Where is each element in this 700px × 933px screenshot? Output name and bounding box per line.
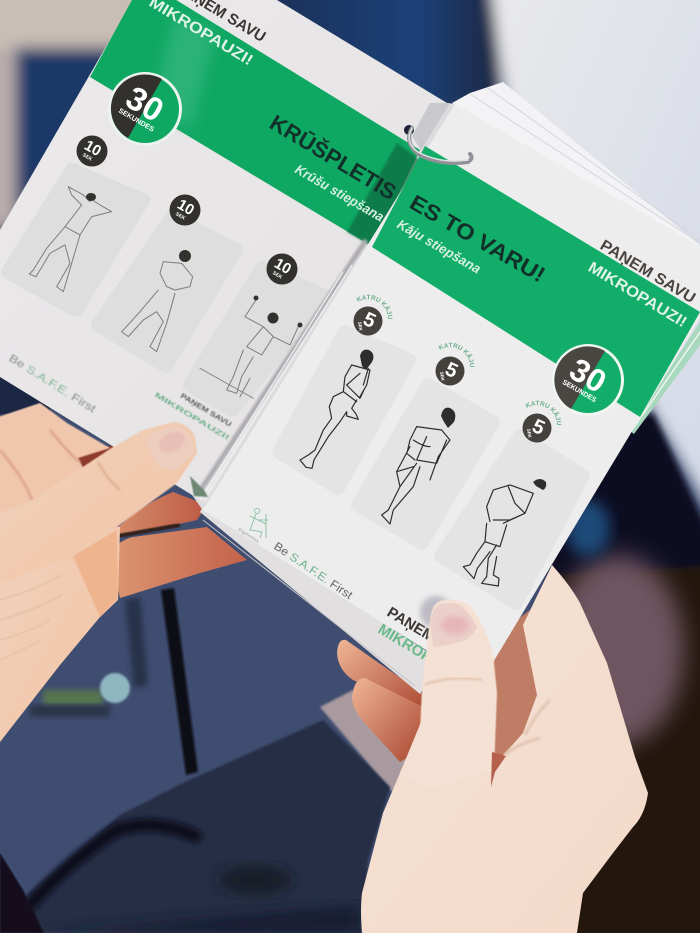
left card green band (90, 0, 420, 247)
left footer brand (153, 392, 232, 442)
figure heads (360, 350, 546, 490)
lower finger (110, 527, 247, 598)
right footer brand: MIKROPAUZI! (375, 621, 468, 686)
thumb shape (400, 600, 497, 790)
right 5 second badges: SEK (439, 371, 446, 382)
right 5 second badges: SEK (357, 321, 364, 332)
right footer brand: PAŅEM SAVU (384, 604, 477, 669)
left 30 seconds badge: SEKUNDES (117, 108, 155, 134)
right card green band (372, 146, 700, 417)
gutter pages under the left card (190, 103, 456, 512)
right header text: PAŅEM SAVU (597, 237, 698, 307)
right 5 second badges: KATRU KĀJU (438, 342, 474, 367)
palm lines (0, 575, 62, 660)
mauve chair shape (552, 555, 684, 745)
lower right dark area (520, 413, 700, 933)
second finger (110, 492, 207, 537)
left header text (146, 0, 268, 69)
knuckle shading (505, 700, 550, 755)
left footer text: Be S.A.F.E. First (6, 352, 98, 416)
right exercise figures (300, 365, 533, 586)
gutter at ring (412, 103, 450, 150)
left 10 second badges: 10 (174, 196, 197, 219)
thumbnail (430, 603, 477, 647)
pale strip beside jacket (320, 690, 410, 795)
finger gap (118, 525, 180, 536)
hand back (361, 565, 648, 933)
left 10 second badges: SEK (271, 270, 284, 281)
blue patch (566, 500, 610, 556)
right 5 second badges: SEK (526, 428, 533, 439)
bottom page edges (200, 505, 440, 694)
thumb shadow on card (420, 596, 452, 628)
left exercise panels (8, 170, 325, 410)
left 30 seconds badge: 30 (120, 79, 170, 129)
left card (0, 0, 447, 503)
right 30 seconds badge (552, 344, 624, 416)
left 30 seconds badge (108, 72, 182, 146)
thumb web (73, 530, 118, 617)
left exercise figures (29, 187, 298, 398)
ergonomics label: Ergonomics (237, 527, 261, 544)
page corner (190, 476, 208, 497)
gutter shadow (198, 240, 366, 494)
left footer brand: MIKROPAUZI! (153, 392, 230, 442)
left hand palm and thumb (0, 403, 197, 742)
thumb (0, 422, 197, 585)
right card title: ES TO VARU! (406, 190, 550, 287)
left footer brand: PAŅEM SAVU (179, 393, 232, 429)
top page edges (452, 82, 700, 280)
furniture legs and light (30, 588, 198, 775)
left 10 second badges (76, 136, 298, 284)
left hand fingers behind cards (70, 445, 247, 598)
dark jacket (0, 720, 390, 933)
right exercise panels (279, 332, 583, 603)
left 10 second badges: SEK (174, 211, 187, 222)
dark gap (70, 445, 125, 510)
right card (203, 105, 700, 686)
right 5 second badges: 5 (442, 358, 461, 383)
right 30 seconds badge: SEKUNDES (561, 379, 597, 404)
back finger two (352, 678, 425, 762)
back of fingers (0, 403, 110, 560)
ergonomics icon (250, 508, 268, 538)
band highlight (155, 15, 215, 130)
right 5 second badges: 5 (360, 308, 379, 333)
knuckle creases (0, 430, 80, 500)
left card title: KRŪŠPLETIS (265, 110, 401, 205)
right header text: MIKROPAUZI! (585, 259, 690, 331)
right 5 second badges: KATRU KĀJU (356, 294, 392, 319)
left card subtitle: Krūšu stiepšana (292, 162, 387, 225)
right footer text: Be S.A.F.E. First (271, 541, 355, 602)
thumb crevice (491, 752, 506, 787)
thumb joint crease (98, 462, 120, 490)
right 5 second badges: 5 (529, 415, 548, 440)
left 10 second badges: 10 (271, 255, 294, 278)
green side edges (629, 322, 700, 434)
card stack pages (190, 82, 700, 694)
palm and wrist (0, 513, 120, 742)
right hand palm and fingers behind cards (337, 565, 648, 933)
left 10 second badges: 10 (81, 137, 104, 160)
left 10 second badges: SEK (81, 152, 94, 163)
right thumb (400, 596, 506, 790)
right 5 second badges (354, 294, 562, 442)
thumb crease (424, 678, 482, 685)
back finger one (337, 640, 425, 715)
metal binder ring (409, 128, 472, 163)
right card subtitle: Kāju stiepšana (394, 217, 484, 277)
fold shadow on band (347, 143, 420, 247)
right header text (585, 237, 698, 331)
ring hole (404, 125, 414, 135)
right 30 seconds badge: 30 (564, 351, 613, 400)
web shadow (490, 610, 545, 770)
right 5 second badges: KATRU KĀJU (525, 400, 562, 425)
thumbnail (146, 428, 194, 470)
